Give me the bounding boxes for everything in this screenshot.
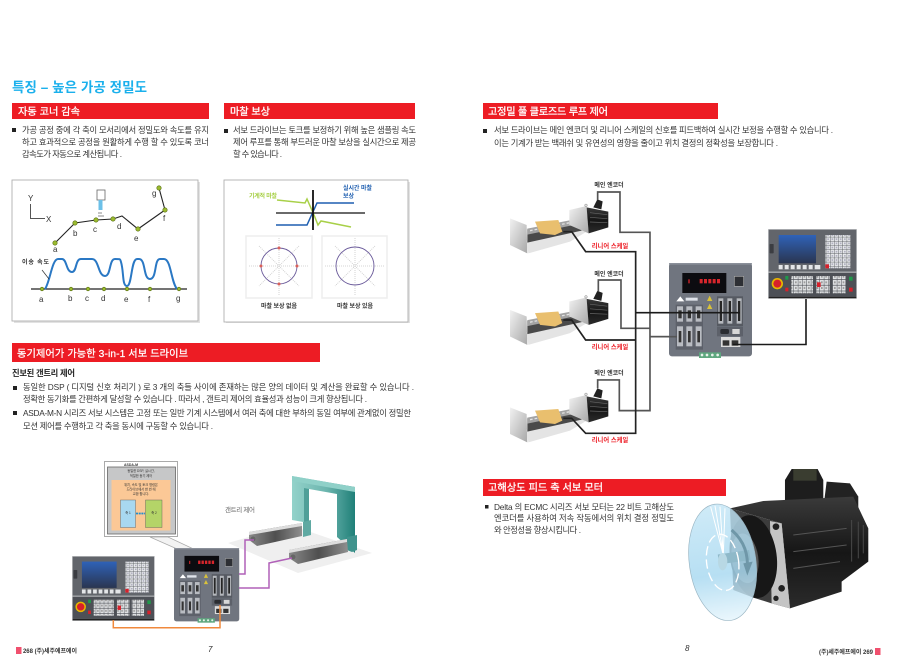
text block: corner deceleration: 감속도가 자동으로 계산됩니다 . [22,149,122,159]
speed chart: g [176,294,180,303]
text block: corner deceleration: 가공 공정 중에 각 축이 모서리에서 정밀도와 속도를 유지 [22,125,209,135]
icon: right CNC controller [768,229,857,299]
gantry: linear axis 2 [289,539,348,564]
panel: high resolution motor heading [483,479,726,496]
icon: left CNC controller [72,556,155,621]
speed chart: e [124,295,129,304]
panel: 3-in-1 heading: 동기제어가 가능한 3-in-1 서보 드라이브 [17,348,188,360]
callout: ASDA-M inset: 축 2 [151,510,157,515]
arrow: orange cable [113,605,220,628]
tool path: d [117,222,121,231]
text block: corner deceleration [12,125,209,159]
text block: gantry control: 진보된 갠트리 제어 [12,368,75,378]
arrow: wiring to drive and controller [636,299,806,344]
text block: gantry control: 정확한 동기화를 간편하게 달성할 수 있습니다 . 따라서 , 갠트리 제어의 효율성과 성능이 크게 향상됩니다 . [23,394,367,404]
tool icon [97,190,105,216]
speed chart: f [148,295,151,304]
callout: ASDA-M inset: 축 1 [125,510,131,515]
polar plot without compensation [246,236,312,298]
tool path: g [152,189,156,198]
tool path [53,186,167,254]
friction waveform [249,184,372,230]
text block: high resolution motor: 와 안정성을 향상시킵니다 . [494,525,581,535]
text block: friction compensation: 제어 루프를 통해 부드러운 마찰 보상을 실시간으로 제공 [233,137,416,147]
labels: main encoder: 메인 엔코더 [594,369,624,377]
text block: closed loop [483,125,833,148]
text block: high resolution motor: 엔코더를 사용하여 저속 작동에서의 위치 결정 정밀도 [494,513,674,523]
icon: linear stage 1 [510,199,608,253]
footer: right page: (주)세주에프에이 269 [819,648,874,656]
text block: gantry control: 동일한 DSP ( 디지털 신호 처리기 ) 로 3 개의 축들 사이에 존재하는 많은 양의 데이터 및 계산을 완료할 수 있습니다 . [23,382,414,392]
panel: friction compensation heading: 마찰 보상 [230,106,271,118]
friction waveform: 기계적 마찰 [249,192,277,200]
footer: right page: 8 [685,644,690,653]
icon: linear stage 3 [510,388,608,442]
text block: friction compensation [224,125,416,159]
panel: friction compensation heading [224,103,415,119]
panel: friction compensation chart: 마찰 보상 있음 [337,302,373,310]
callout: ASDA-M inset: 위치, 속도 및 토크 명령은 [124,482,158,487]
text block: gantry control: 모션 제어를 수행하고 각 축을 동시에 구동할 수 있습니다 . [23,421,213,431]
text block: corner deceleration: 하고 효과적으로 공정을 원활하게 수행 할 수 있도록 코너 [22,137,209,147]
tool path: f [163,214,166,223]
panel: friction compensation chart [224,180,410,323]
friction waveform: 보상 [343,192,354,200]
title: 특징 – 높은 가공 정밀도 [12,80,147,95]
text block: gantry control [12,368,414,431]
callout: ASDA-M inset: 드라이브에서 한 번 에 [126,486,156,492]
speed chart: d [101,294,105,303]
icon: right servo drive [669,263,752,358]
labels: linear scale: 리니어 스케일 [592,342,628,351]
icon: servo motor with encoder disc [681,469,868,625]
labels: linear scale [592,241,628,444]
panel: closed loop heading: 고정밀 풀 클로즈드 루프 제어 [488,106,608,118]
panel: corner path and speed chart [12,180,200,323]
text block: friction compensation: 서보 드라이브는 토크를 보정하기 위해 높은 샘플링 속도 [233,125,416,135]
panel: high resolution motor heading: 고해상도 피드 축 서보 모터 [488,481,603,494]
labels: main encoder: 메인 엔코더 [594,270,624,278]
friction waveform: 실시간 마찰 [343,184,372,192]
label: gantry control: 갠트리 제어 [225,505,255,514]
callout: ASDA-M inset: 동일한 DSP, 실시간, [127,468,155,473]
axis icon [28,194,52,224]
text block: friction compensation: 할 수 있습니다 . [233,149,282,159]
footer: left page: 7 [208,645,213,654]
axis icon: X [46,215,52,224]
panel: 3-in-1 heading [12,343,320,362]
gantry: floor and frame [228,476,372,573]
callout: ASDA-M inset [104,462,217,560]
labels: linear scale: 리니어 스케일 [592,435,628,444]
text block: closed loop: 서보 드라이브는 메인 엔코더 및 리니어 스케일의 신호를 피드백하여 실시간 보정을 수행할 수 있습니다 . [494,125,833,135]
speed chart: b [68,294,73,303]
speed chart: a [39,295,44,304]
polar plot with compensation [322,236,387,298]
text block: high resolution motor [485,502,674,535]
icon: linear stage 2 [510,291,608,345]
labels: main encoder: 메인 엔코더 [594,181,624,189]
labels: linear scale: 리니어 스케일 [592,241,628,250]
text block: closed loop: 이는 기계가 받는 백래쉬 및 유연성의 영향을 줄이고 위치 결정의 정확성을 보장합니다 . [494,138,778,148]
tool path: c [93,225,97,234]
speed chart: 이송 속도 [22,258,49,266]
panel: friction compensation chart: 마찰 보상 없음 [261,302,297,310]
callout: ASDA-M inset: 적절한 동기 제어 [130,473,152,478]
panel: closed loop heading [483,103,718,119]
tool path: b [73,229,78,238]
labels: main encoder [594,181,624,377]
footer: right page [685,644,880,656]
icon: left servo drive [174,548,239,623]
panel: corner deceleration heading: 자동 코너 감속 [18,106,80,118]
callout: ASDA-M inset: ASDA-M [124,463,138,467]
footer: left page [16,645,213,655]
text block: high resolution motor: Delta 의 ECMC 시리즈 서보 모터는 22 비트 고해상도 [494,502,674,512]
arrow: main encoder wiring [598,192,677,411]
gantry: linear axis 1 [249,523,302,546]
speed chart: c [85,294,89,303]
footer: left page: 268 (주)세주에프에이 [23,647,77,655]
axis icon: Y [28,194,34,203]
panel: corner deceleration heading [12,103,209,119]
callout: ASDA-M inset: 교환 합니다. [133,491,149,496]
arrow: linear scale wiring [563,232,636,433]
text block: gantry control: ASDA-M-N 시리즈 서보 시스템은 고정 또는 일반 기계 시스템에서 여러 축에 대한 부하의 동일 여부에 관계없이 정밀한 [23,408,411,418]
tool path: e [134,234,139,243]
speed chart [22,258,187,304]
tool path: a [53,245,58,254]
arrow: purple cables to gantry [239,540,292,588]
